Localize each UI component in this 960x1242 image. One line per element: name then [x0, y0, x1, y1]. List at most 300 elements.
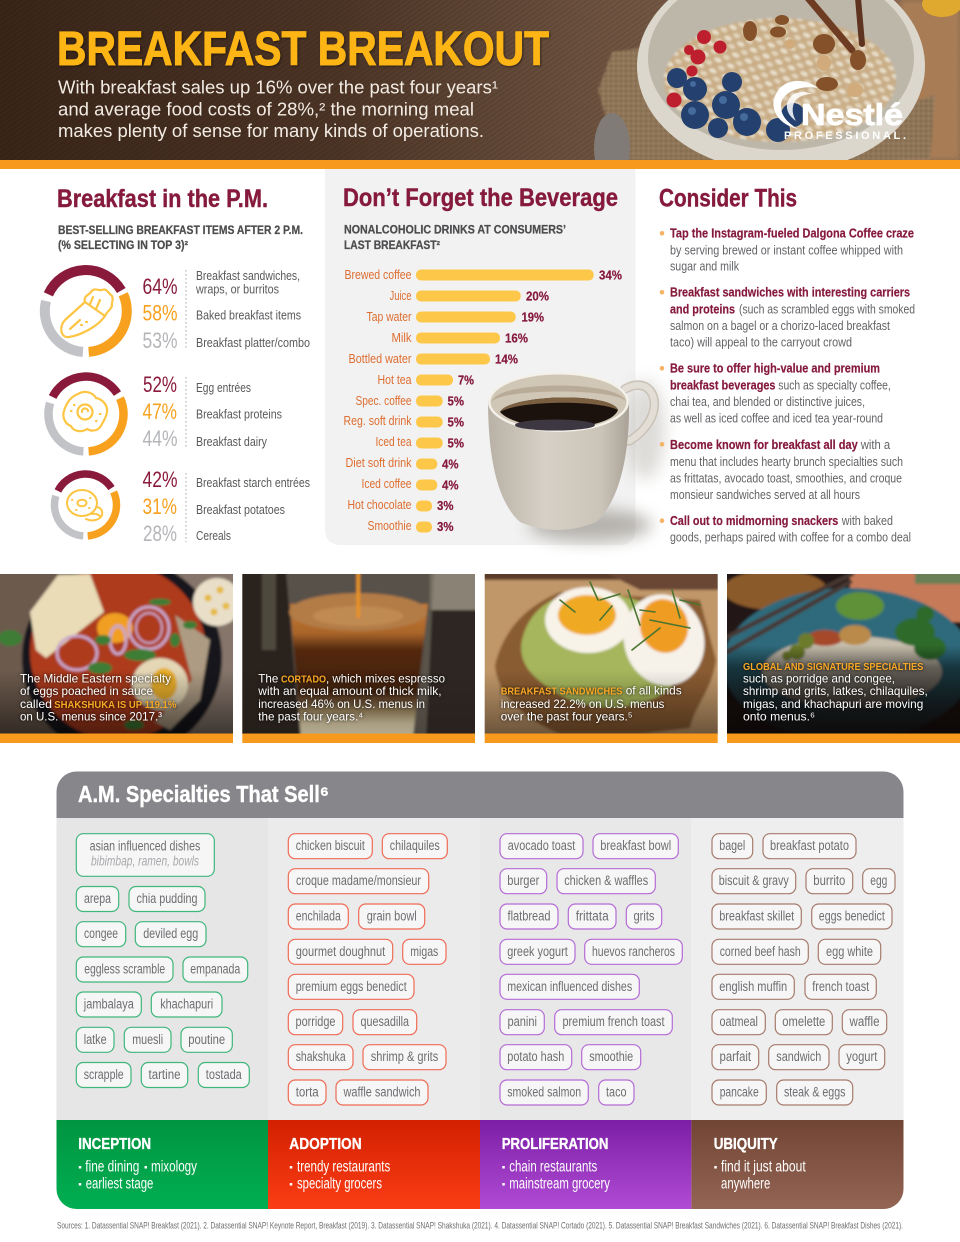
stage: adoption: specialty grocers: [297, 1175, 382, 1192]
tag: huevos rancheros: [585, 939, 682, 964]
bar category labels: Bottled water: [348, 352, 412, 366]
tag: frittata: [568, 904, 616, 929]
donut chart 3 with bagel icon: [54, 474, 116, 536]
tag: eggless scramble: eggless scramble: [84, 962, 165, 976]
bar values: 3%: [437, 499, 454, 513]
subheading: (% SELECTING IN TOP 3)²: [58, 240, 188, 252]
tags: inception: [76, 834, 249, 1088]
tag: greek yogurt: greek yogurt: [507, 944, 568, 959]
intro text: With breakfast sales up 16% over the past four years¹: [58, 78, 498, 98]
bar category labels: Juice: [390, 289, 412, 303]
tag: flatbread: flatbread: [508, 908, 550, 924]
percentages group 3: 42%: [142, 467, 178, 492]
percentages group 2: [142, 372, 178, 451]
bars: [416, 270, 594, 532]
tag: english muffin: [712, 974, 794, 999]
percentages group 1: 64%: [142, 274, 178, 299]
caption: [257, 671, 445, 724]
column backgrounds: [56, 818, 904, 1120]
bar category labels: Milk: [392, 331, 412, 345]
tag: potato hash: potato hash: [507, 1049, 564, 1064]
subheading: BEST-SELLING BREAKFAST ITEMS AFTER 2 P.M.: [58, 225, 303, 237]
tag: omelette: [775, 1010, 832, 1035]
tip: Dalgona coffee: sugar and milk: [670, 259, 739, 274]
tag: avocado toast: avocado toast: [508, 838, 575, 853]
panel: Consider This: [659, 184, 915, 545]
tip: midmorning snackers: with baked: [841, 513, 893, 528]
tag: congee: [76, 922, 126, 947]
stage: inception: ▪: [78, 1180, 82, 1190]
labels group 1: Baked breakfast items: [196, 308, 301, 322]
subheading: NONALCOHOLIC DRINKS AT CONSUMERS’: [344, 224, 566, 236]
tag: muesli: [124, 1027, 171, 1052]
caption: of all kinds: [626, 683, 682, 697]
rice bowl photo: [722, 570, 960, 740]
subheading: [58, 225, 303, 252]
tag: mexican influenced dishes: [500, 974, 639, 999]
tip: breakfast sandwiches: and proteins: [670, 302, 735, 317]
tip: breakfast sandwiches: salmon on a bagel or a chorizo-laced breakfast: [670, 318, 890, 333]
caption: [501, 683, 682, 724]
logo: Nestlé Professional: PROFESSIONAL.: [784, 130, 906, 142]
tag: tostada: tostada: [206, 1067, 242, 1082]
subheading: [344, 224, 566, 252]
bar category labels: Iced tea: [376, 435, 412, 449]
header background photo: oatmeal bowl: [0, 0, 960, 160]
tip: premium beverages: as well as iced coffee and iced tea year-round: [670, 411, 883, 426]
bar values: 19%: [522, 310, 544, 324]
caption: the past four years.⁴: [258, 710, 363, 724]
labels group 3: Breakfast potatoes: [196, 503, 285, 517]
stage: ubiquity: anywhere: [721, 1175, 770, 1192]
labels group 3: [186, 473, 310, 543]
tag: taco: [599, 1080, 634, 1105]
tag: asian influenced dishes: bibimbap, ramen, bowls: [91, 854, 199, 869]
tag: eggs benedict: eggs benedict: [819, 908, 885, 924]
tag: pancake: pancake: [720, 1084, 759, 1100]
tag: jambalaya: jambalaya: [83, 996, 134, 1012]
labels group 3: Breakfast starch entrées: [196, 476, 310, 490]
bar category labels: Hot chocolate: [348, 498, 412, 512]
tag: empanada: empanada: [190, 962, 241, 976]
percentages group 1: 58%: [142, 300, 178, 326]
tag: french toast: french toast: [812, 979, 869, 994]
tag: grits: [626, 904, 662, 929]
tag: breakfast potato: [763, 834, 856, 859]
bar category labels: Diet soft drink: [346, 456, 412, 470]
intro text: makes plenty of sense for many kinds of operations.: [58, 121, 484, 141]
tag: mexican influenced dishes: mexican influenced dishes: [507, 979, 632, 994]
cortado photo: [238, 570, 480, 740]
header accent bar: [0, 160, 960, 169]
tag: english muffin: english muffin: [719, 979, 787, 994]
percentages group 2: 52%: [143, 372, 177, 397]
stage: proliferation: [480, 1120, 691, 1209]
bar category labels: Hot tea: [378, 373, 412, 387]
icon: fried egg: [63, 392, 107, 431]
tags: adoption: [288, 834, 447, 1105]
labels group 1: Breakfast platter/combo: [196, 336, 310, 350]
photo card: avocado toast: [480, 570, 723, 743]
tip: breakfast all day: menu that includes hearty brunch specialties such: [670, 454, 903, 469]
tag: enchilada: enchilada: [296, 908, 341, 924]
tag: croque madame/monsieur: [288, 869, 429, 894]
tip: premium beverages: Be sure to offer high-value and premium: [670, 361, 880, 376]
stage: ubiquity: ▪: [714, 1162, 718, 1174]
tip: Dalgona coffee: by serving brewed or instant coffee whipped with: [670, 242, 903, 257]
tip: premium beverages: [670, 361, 891, 426]
labels group 1: [186, 269, 310, 350]
bar values: 34%: [599, 268, 622, 282]
tip: breakfast sandwiches: Breakfast sandwiches with interesting carriers: [670, 285, 910, 300]
tag: bagel: bagel: [719, 838, 745, 853]
tag: scrapple: [76, 1062, 131, 1088]
panel: Breakfast in the P.M.: [45, 185, 310, 546]
stage: inception: INCEPTION: [78, 1136, 151, 1153]
tag: waffle sandwich: waffle sandwich: [343, 1084, 420, 1100]
percentages group 3: 31%: [142, 494, 177, 519]
panel: Don't Forget the Beverage: [325, 169, 665, 545]
header banner: [0, 0, 960, 183]
caption: with an equal amount of thick milk,: [257, 684, 442, 698]
tag: greek yogurt: [500, 939, 575, 964]
tag: burger: [500, 869, 547, 894]
percentages group 1: 53%: [142, 328, 178, 353]
stage: proliferation: chain restaurants: [509, 1158, 597, 1175]
labels group 3: Cereals: [196, 529, 231, 543]
heading: Breakfast in the P.M.: [57, 185, 268, 213]
stage: proliferation: ▪: [502, 1162, 506, 1174]
tag: chicken & waffles: chicken & waffles: [564, 873, 648, 888]
caption: called: [20, 697, 52, 711]
tag: taco: taco: [606, 1084, 627, 1100]
panel heading: A.M. Specialties That Sell⁶: [78, 781, 329, 807]
bar category labels: Brewed coffee: [344, 268, 412, 282]
stage: adoption: ▪: [289, 1162, 293, 1174]
caption: BREAKFAST SANDWICHES: [501, 685, 622, 697]
tag: premium eggs benedict: premium eggs benedict: [296, 979, 407, 994]
tip: breakfast all day: Become known for breakfast all day: [670, 437, 858, 452]
tip: premium beverages: chai tea, and blended or distinctive juices,: [670, 394, 865, 409]
tag: porridge: [288, 1010, 343, 1035]
tip: Dalgona coffee: Tap the Instagram-fueled Dalgona Coffee craze: [670, 226, 914, 241]
bullet markers: [660, 231, 664, 523]
tag: gourmet doughnut: [288, 939, 393, 964]
heading: Consider This: [659, 184, 797, 212]
title: BREAKFAST BREAKOUT: [57, 23, 549, 76]
tag: torta: torta: [296, 1084, 319, 1100]
tip: breakfast all day: [670, 437, 903, 502]
labels group 1: wraps, or burritos: [195, 282, 279, 296]
tags: ubiquity: [712, 834, 895, 1105]
tag: poutine: poutine: [188, 1032, 225, 1047]
tip: midmorning snackers: Call out to midmorning snackers: [670, 513, 838, 528]
stage: adoption: trendy restaurants: [297, 1158, 390, 1175]
caption: GLOBAL AND SIGNATURE SPECIALTIES: [743, 661, 923, 673]
tag: sandwich: [769, 1045, 829, 1070]
avocado toast photo: [480, 570, 723, 740]
bar category labels: Smoothie: [368, 519, 412, 533]
labels group 2: Breakfast dairy: [196, 435, 268, 449]
tag: arepa: arepa: [84, 891, 111, 906]
heading: Don’t Forget the Beverage: [343, 184, 618, 212]
tag: steak & eggs: steak & eggs: [784, 1084, 846, 1100]
icon: bagel: [67, 490, 102, 520]
caption: The: [258, 671, 279, 685]
percentages group 2: 44%: [142, 426, 178, 451]
stage: adoption: [268, 1120, 480, 1209]
tag: panini: panini: [507, 1014, 537, 1029]
tag: corned beef hash: [712, 939, 808, 964]
stage: inception: ▪: [78, 1162, 82, 1174]
tag: shrimp & grits: [363, 1045, 446, 1070]
tag: quesadilla: [353, 1010, 417, 1035]
tag: asian influenced dishes: asian influenced dishes: [90, 839, 201, 854]
tag: eggless scramble: [76, 957, 173, 982]
bar category labels: Reg. soft drink: [344, 414, 412, 428]
tag: chilaquiles: chilaquiles: [390, 838, 440, 853]
intro text: [58, 78, 498, 141]
stage: inception: ▪: [144, 1162, 148, 1174]
tag: french toast: [805, 974, 876, 999]
caption: [20, 671, 177, 724]
stage: ubiquity: UBIQUITY: [714, 1136, 778, 1153]
tag: jambalaya: [76, 992, 141, 1017]
tag: oatmeal: oatmeal: [719, 1014, 758, 1029]
tag: deviled egg: deviled egg: [143, 926, 198, 941]
tag: potato hash: [500, 1045, 572, 1070]
tag: sandwich: sandwich: [776, 1049, 821, 1064]
stage: proliferation: PROLIFERATION: [502, 1136, 608, 1153]
tag: latke: [76, 1027, 114, 1052]
bar values: 16%: [505, 332, 528, 346]
tag: grain bowl: [359, 904, 425, 929]
tag: breakfast bowl: [593, 834, 678, 859]
tag: premium eggs benedict: [288, 974, 414, 999]
tag: poutine: [181, 1027, 232, 1052]
tag: huevos rancheros: huevos rancheros: [592, 944, 675, 959]
icon: coffee cup: [488, 372, 665, 541]
caption: CORTADO: [281, 673, 326, 685]
tag: chicken & waffles: [557, 869, 655, 894]
tag: torta: [288, 1080, 326, 1105]
stage: ubiquity: [691, 1120, 904, 1209]
stage: inception: fine dining: [85, 1158, 139, 1175]
caption: increased 22.2% on U.S. menus: [501, 697, 664, 711]
caption: such as porridge and congee,: [743, 671, 895, 685]
tag: breakfast bowl: breakfast bowl: [600, 838, 671, 853]
stage: inception: mixology: [151, 1158, 197, 1175]
tag: pancake: [712, 1080, 766, 1105]
tag: chicken biscuit: chicken biscuit: [296, 838, 365, 853]
tag: grain bowl: grain bowl: [367, 908, 417, 924]
tip: premium beverages: breakfast beverages: [670, 378, 776, 393]
accent bar: [485, 734, 718, 743]
caption: The Middle Eastern specialty: [20, 671, 171, 685]
tag: scrapple: scrapple: [84, 1067, 124, 1082]
bar values: 20%: [526, 290, 549, 304]
donut chart 2 with fried egg icon: [48, 377, 124, 451]
bar values: 14%: [495, 352, 518, 366]
caption: of eggs poached in sauce: [20, 684, 153, 698]
tag: burrito: [806, 869, 853, 894]
tag: quesadilla: quesadilla: [361, 1014, 409, 1029]
tag: tostada: [198, 1062, 249, 1088]
tag: breakfast skillet: [712, 904, 801, 929]
bar category labels: Iced coffee: [362, 477, 412, 491]
photo card: cortado: [238, 570, 480, 743]
bar category labels: Spec. coffee: [356, 394, 412, 408]
tag: shrimp & grits: shrimp & grits: [371, 1049, 438, 1064]
labels group 1: Breakfast sandwiches,: [196, 269, 300, 283]
caption: SHAKSHUKA IS UP 119.1%: [54, 699, 177, 711]
bar values: 5%: [448, 436, 464, 450]
stage: ubiquity: find it just about: [721, 1158, 806, 1175]
tag: burrito: burrito: [813, 873, 845, 888]
caption: over the past four years.⁵: [501, 710, 633, 724]
tag: waffle sandwich: [336, 1080, 428, 1105]
caption: migas, and khachapuri are moving: [743, 697, 923, 711]
percentages group 1: [142, 274, 178, 353]
tag: smoothie: smoothie: [589, 1049, 633, 1064]
tip: midmorning snackers: [670, 513, 911, 545]
accent bar: [242, 734, 475, 743]
tag: asian influenced dishes: [76, 834, 214, 876]
logo: Nestlé Professional: Nestlé: [801, 97, 903, 132]
tag: gourmet doughnut: gourmet doughnut: [296, 944, 385, 959]
tag: avocado toast: [500, 834, 583, 859]
labels group 2: Egg entrées: [196, 381, 251, 395]
stage: proliferation: ▪: [502, 1180, 506, 1190]
stage: adoption: ▪: [289, 1180, 293, 1190]
bar category labels: [344, 268, 412, 533]
caption: onto menus.⁶: [743, 710, 815, 724]
stage: inception: earliest stage: [86, 1175, 153, 1192]
tag: premium french toast: premium french toast: [562, 1014, 665, 1029]
caption: , which mixes espresso: [326, 671, 445, 685]
percentages group 2: 47%: [142, 399, 177, 424]
tag: smoothie: [582, 1045, 641, 1070]
tag: yogurt: [839, 1045, 885, 1070]
tag: khachapuri: khachapuri: [160, 996, 213, 1012]
tag: migas: migas: [410, 944, 438, 959]
caption: on U.S. menus since 2017.³: [20, 710, 162, 724]
tag: porridge: porridge: [296, 1014, 336, 1029]
tag: panini: [500, 1010, 544, 1035]
tag: corned beef hash: corned beef hash: [720, 944, 801, 959]
bar values: 5%: [448, 416, 464, 430]
tag: oatmeal: [712, 1010, 765, 1035]
tag: croque madame/monsieur: croque madame/monsieur: [296, 873, 421, 888]
labels group 2: [186, 377, 282, 449]
tag: smoked salmon: smoked salmon: [507, 1084, 581, 1100]
accent bar: [0, 734, 233, 743]
tag: eggs benedict: [812, 904, 892, 929]
tip: breakfast sandwiches: [670, 285, 915, 350]
tip: breakfast sandwiches: taco) will appeal to the carryout crowd: [670, 335, 852, 350]
bar values: 4%: [442, 458, 458, 472]
tag: deviled egg: [135, 922, 206, 947]
tag: egg: [863, 869, 895, 894]
tag: khachapuri: [151, 992, 222, 1017]
shakshuka photo: [0, 574, 233, 734]
subheading: LAST BREAKFAST²: [344, 240, 440, 252]
bar values: 4%: [442, 478, 458, 492]
bar values: 3%: [437, 520, 454, 534]
tag: empanada: [183, 957, 248, 982]
bar chart: [344, 268, 622, 534]
caption: [743, 661, 928, 724]
tag: flatbread: [500, 904, 558, 929]
tag: yogurt: yogurt: [846, 1049, 877, 1064]
tag: biscuit & gravy: biscuit & gravy: [719, 873, 789, 888]
tag: shakshuka: [288, 1045, 353, 1070]
stage: adoption: ADOPTION: [289, 1136, 362, 1153]
photo card: shakshuka: [0, 574, 233, 743]
tags: proliferation: [500, 834, 682, 1105]
tag: premium french toast: [555, 1010, 672, 1035]
tip: breakfast sandwiches: (such as scrambled eggs with smoked: [739, 302, 915, 317]
bar values: 5%: [448, 394, 464, 408]
tag: tartine: [141, 1062, 188, 1088]
tag: egg: egg: [870, 873, 887, 888]
tag: arepa: [76, 886, 119, 912]
percentages group 3: [142, 467, 178, 546]
bar values: [437, 268, 622, 534]
tip: breakfast all day: monsieur sandwiches served at all hours: [670, 487, 860, 502]
tag: bagel: [712, 834, 753, 859]
tag: biscuit & gravy: [712, 869, 796, 894]
tag: chia pudding: [129, 886, 205, 912]
tag: grits: grits: [634, 908, 655, 924]
tag: steak & eggs: [777, 1080, 853, 1105]
donut chart 1 with wrap icon: [45, 270, 127, 352]
caption: shrimp and grits, latkes, chilaquiles,: [743, 684, 928, 698]
accent bar: [727, 734, 960, 743]
panel background: [325, 169, 636, 545]
tag: chia pudding: chia pudding: [136, 891, 198, 906]
stage: inception: [56, 1120, 268, 1209]
tag: burger: burger: [507, 873, 540, 888]
tag: congee: congee: [84, 926, 118, 941]
tip: Dalgona coffee: [670, 226, 914, 274]
panel: A.M. Specialties That Sell: [56, 772, 904, 1209]
logo: Nestlé Professional: [773, 81, 906, 142]
tag: breakfast skillet: breakfast skillet: [719, 908, 794, 924]
tag: waffle: [842, 1010, 887, 1035]
stage: proliferation: mainstream grocery: [509, 1175, 610, 1192]
tip: breakfast all day: as frittatas, avocado toast, smoothies, and croque: [670, 470, 902, 485]
percentages group 3: 28%: [143, 521, 177, 546]
bar category labels: Tap water: [366, 310, 412, 324]
tag: parfait: [712, 1045, 759, 1070]
caption: increased 46% on U.S. menus in: [258, 697, 425, 711]
labels group 2: Breakfast proteins: [196, 408, 282, 422]
tag: breakfast potato: breakfast potato: [770, 838, 849, 853]
tag: omelette: omelette: [782, 1014, 825, 1029]
tag: parfait: parfait: [720, 1049, 751, 1064]
tag: muesli: muesli: [132, 1032, 163, 1047]
tag: waffle: waffle: [849, 1014, 880, 1029]
panel header: [56, 772, 904, 818]
tag: migas: [403, 939, 446, 964]
tip: premium beverages: such as specialty coffee,: [778, 378, 891, 393]
tag: smoked salmon: [500, 1080, 588, 1105]
icon: wrap: [61, 289, 113, 337]
tag: egg white: egg white: [826, 944, 873, 959]
bar values: 7%: [458, 374, 474, 388]
tag: chilaquiles: [382, 834, 447, 859]
